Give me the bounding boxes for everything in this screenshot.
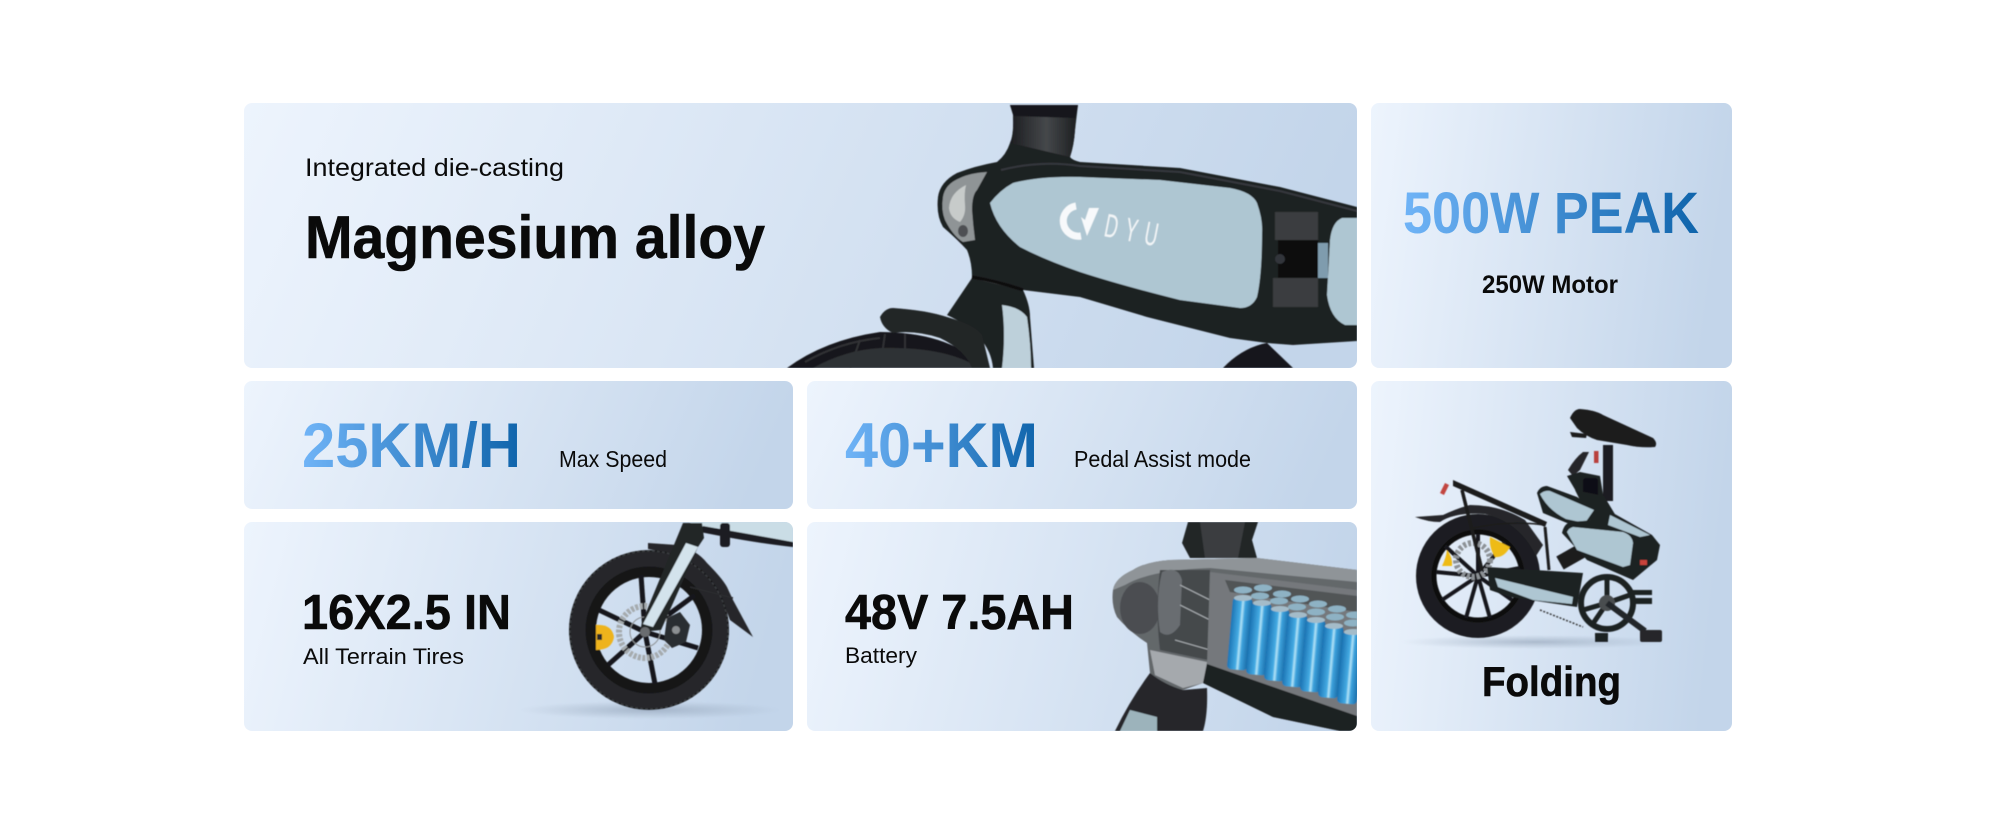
folded frame upper plate bbox=[1537, 486, 1597, 525]
stat: 500W peak: 500W PEAK bbox=[1403, 181, 1699, 246]
main frame bbox=[938, 105, 1357, 345]
fork bbox=[947, 278, 1034, 368]
front tyre bbox=[787, 332, 985, 368]
stat: 16x2.5 in: 16X2.5 IN bbox=[302, 586, 511, 640]
panel: tires bbox=[244, 522, 793, 731]
brake disc bbox=[619, 606, 671, 658]
subtitle: integrated die-casting: Integrated die-casting bbox=[305, 154, 564, 182]
fender bbox=[880, 308, 990, 368]
seat bbox=[1570, 409, 1656, 447]
folded frame lower plate bbox=[1562, 507, 1660, 580]
illustration: bike frame close-up bbox=[787, 105, 1357, 368]
panel: battery bbox=[807, 522, 1364, 731]
label: 250W motor: 250W Motor bbox=[1482, 271, 1618, 299]
DYU logo: DYU bbox=[1102, 207, 1169, 255]
housing bbox=[1112, 558, 1357, 731]
caliper bbox=[664, 612, 690, 648]
DYU logo bbox=[1059, 202, 1159, 246]
fork bbox=[640, 523, 704, 632]
illustration: translucent battery housing bbox=[1112, 522, 1364, 731]
spokes bbox=[599, 575, 698, 684]
panel: folding bbox=[1371, 381, 1732, 731]
rear wheel bbox=[1426, 524, 1530, 628]
panel: 25 km/h bbox=[244, 381, 793, 509]
label: all terrain tires: All Terrain Tires bbox=[303, 644, 464, 669]
fender bbox=[648, 543, 753, 637]
stat: 40+KM: 40+KM bbox=[845, 411, 1038, 481]
folding hinge bbox=[1275, 212, 1318, 240]
rear tyre bbox=[1223, 343, 1293, 368]
panel plate bbox=[990, 177, 1262, 308]
heading: folding: Folding bbox=[1482, 658, 1621, 705]
stat: 48V 7.5AH: 48V 7.5AH bbox=[845, 586, 1074, 640]
stem bbox=[1182, 522, 1258, 558]
label: pedal assist mode: Pedal Assist mode bbox=[1074, 446, 1251, 472]
tray bbox=[1207, 572, 1357, 720]
top frame plate bbox=[690, 522, 793, 547]
heading: magnesium alloy: Magnesium alloy bbox=[305, 204, 766, 271]
tyre bbox=[582, 564, 716, 696]
illustration: front wheel bbox=[550, 522, 793, 717]
label: max speed: Max Speed bbox=[559, 446, 667, 472]
chainring, crank and pedal bbox=[1581, 577, 1633, 629]
panel: 500W peak bbox=[1371, 103, 1732, 368]
valve marker bbox=[596, 625, 614, 650]
panel: 40+ km bbox=[807, 381, 1357, 509]
second panel plate bbox=[1327, 218, 1357, 325]
illustration: folded bike bbox=[1400, 409, 1670, 649]
lower frame bar bbox=[1487, 567, 1583, 607]
battery cells bbox=[1227, 584, 1364, 705]
stat: 25KM/H: 25KM/H bbox=[302, 411, 521, 481]
label: battery: Battery bbox=[845, 643, 917, 668]
lower fork and screen bbox=[1115, 673, 1207, 731]
panel: magnesium alloy bbox=[244, 103, 1357, 368]
rear fender and rack bbox=[1415, 505, 1543, 556]
head light bbox=[942, 172, 987, 242]
